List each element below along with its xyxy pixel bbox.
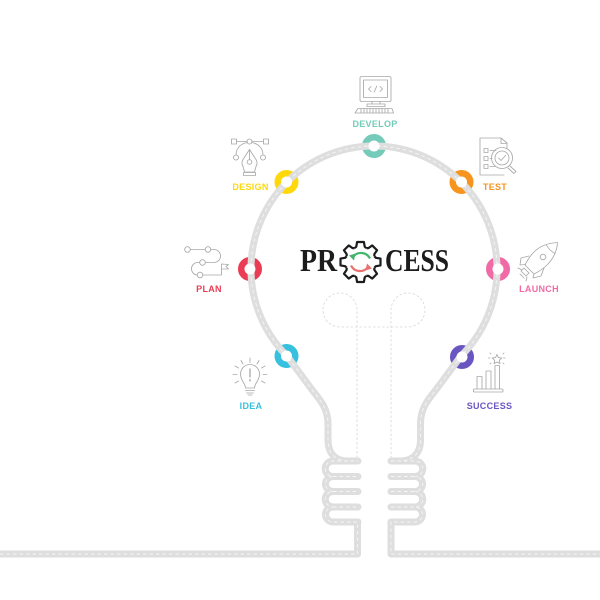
- road: light bulb outline: [0, 146, 600, 554]
- icon: success bars and star: [474, 353, 505, 392]
- icon: test document with magnifier: [480, 138, 516, 175]
- title: PROCESS: [300, 242, 449, 282]
- icon: launch rocket: [518, 242, 558, 281]
- label: design: DESIGN: [232, 182, 269, 192]
- title: PROCESS: CESS: [385, 242, 449, 278]
- icon: plan route: [185, 247, 228, 278]
- label: develop: DEVELOP: [352, 119, 398, 129]
- label: launch: LAUNCH: [519, 284, 559, 294]
- icon: develop computer: [355, 76, 394, 113]
- icon: idea bulb: [233, 358, 267, 395]
- filament dashed outline: [323, 293, 425, 458]
- title: PROCESS: PR: [300, 242, 338, 278]
- icon: design pen tool: [232, 139, 268, 176]
- icon: gear with cycle arrows: [340, 242, 380, 282]
- label: test: TEST: [483, 182, 507, 192]
- node rings: [242, 138, 506, 366]
- label: plan: PLAN: [196, 284, 222, 294]
- label: idea: IDEA: [240, 401, 263, 411]
- node holes: [244, 140, 504, 362]
- label: success: SUCCESS: [467, 401, 512, 411]
